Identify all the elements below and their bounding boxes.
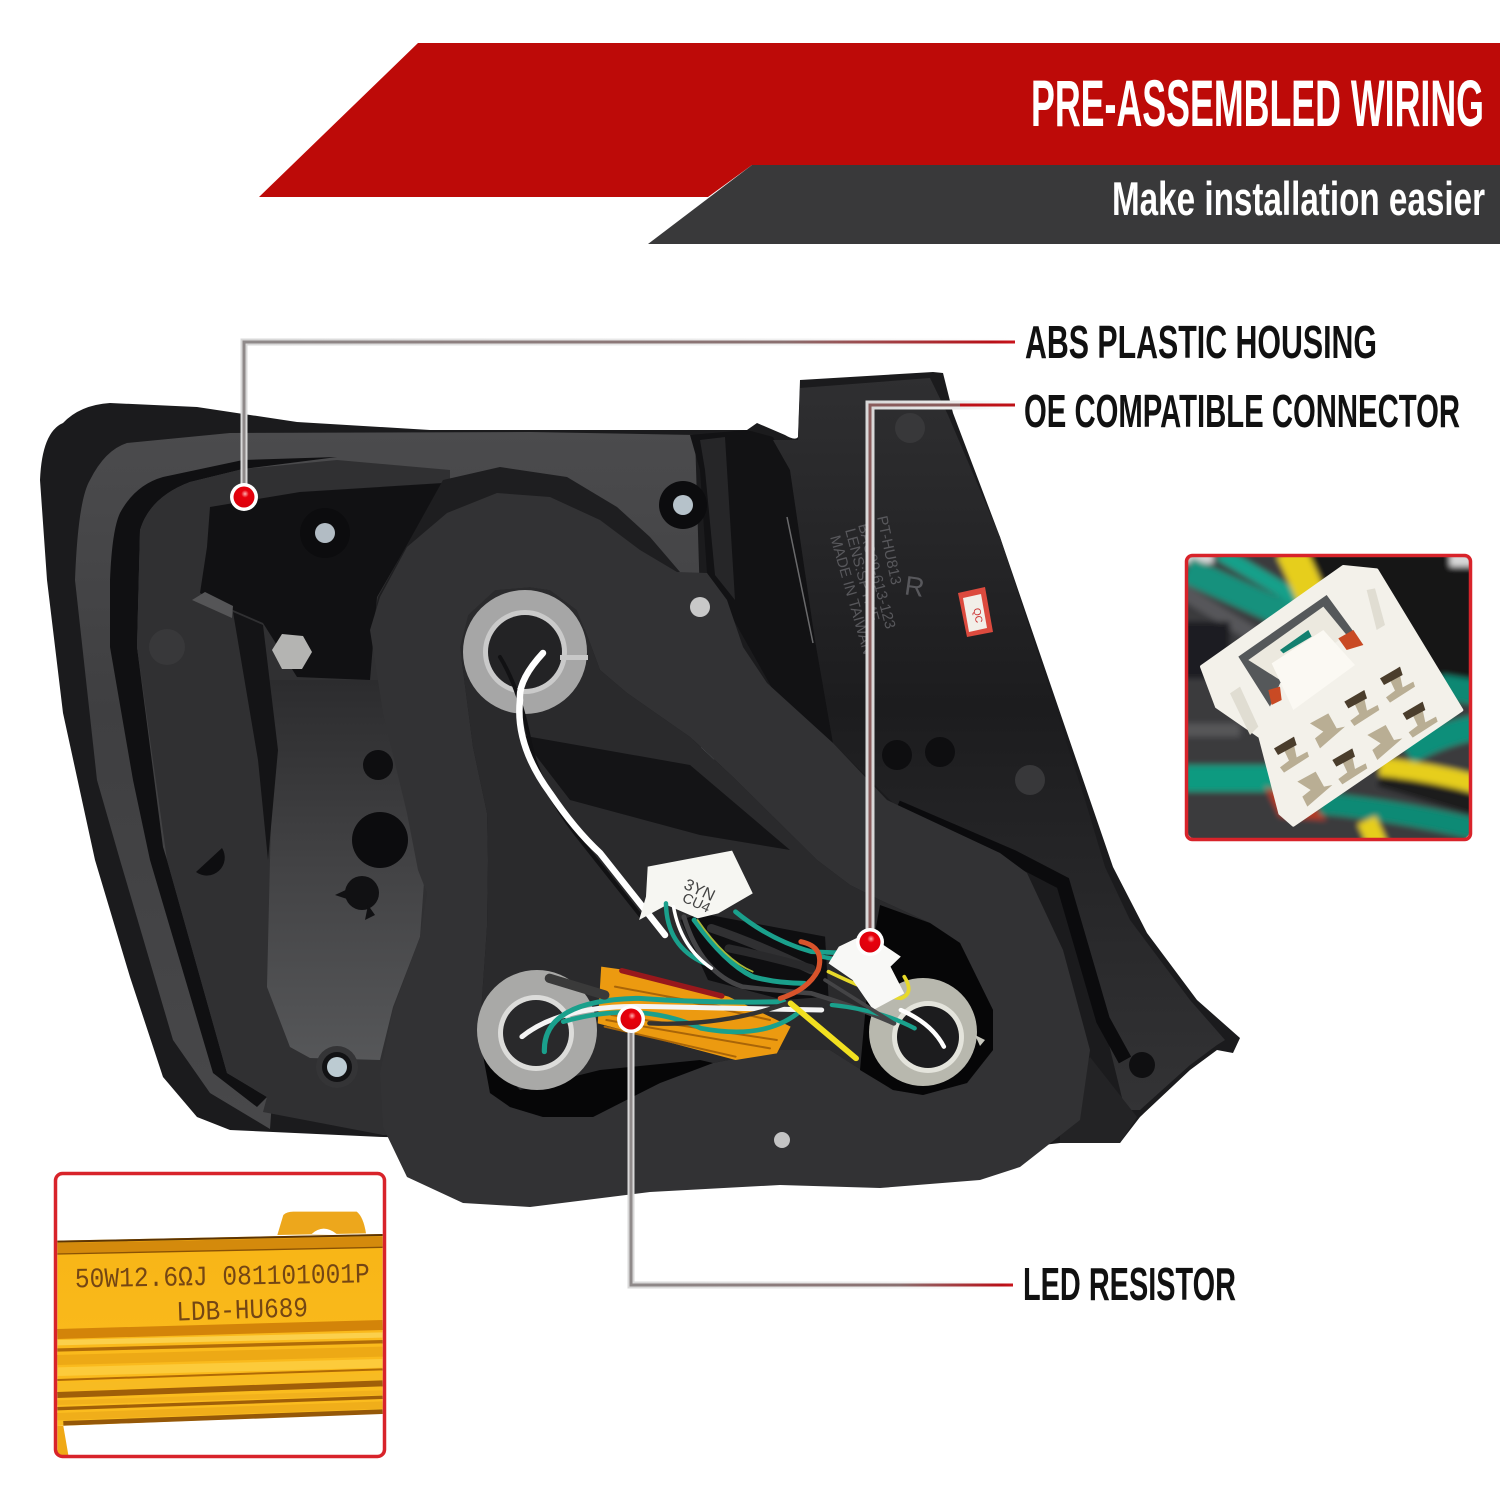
leader tip — [960, 404, 1015, 406]
green wires — [666, 903, 705, 963]
upper wires — [500, 653, 665, 935]
white connector — [639, 851, 753, 920]
connector body — [1202, 567, 1462, 825]
harness shadow — [680, 913, 829, 1000]
led resistor body — [598, 967, 791, 1060]
nub — [1129, 1052, 1155, 1078]
panel: resistor close-up — [55, 1173, 384, 1456]
part marks: LENS:SPYME — [841, 527, 882, 624]
leader halo — [244, 342, 1015, 497]
cavity shadow left — [482, 1050, 713, 1117]
cavity shadow right — [860, 905, 993, 1095]
part marks: BAG09-613-123 — [854, 522, 899, 631]
lighter rim band — [75, 432, 700, 1129]
sticker: QC — [970, 607, 984, 624]
leader line — [870, 405, 1015, 942]
leader halo — [631, 1019, 1013, 1285]
orange band — [780, 942, 820, 998]
socket: lower left — [477, 970, 597, 1090]
small white connector — [829, 933, 904, 1010]
cavity shadow centre — [520, 735, 790, 850]
tail light housing — [40, 372, 1240, 1207]
black recess — [200, 483, 443, 680]
leader line — [631, 1019, 1013, 1285]
inner panel — [137, 460, 450, 1135]
inner cavity — [460, 587, 993, 1117]
leader halo — [870, 405, 1015, 942]
part marks — [826, 514, 926, 656]
lower socket wires — [522, 1006, 822, 1037]
inset frame — [56, 1174, 384, 1456]
wiring harness: CU4 — [680, 890, 713, 917]
right wing — [773, 378, 1225, 1110]
label: LED RESISTOR — [1023, 1258, 1236, 1310]
screw — [316, 1046, 358, 1088]
resistor print: 50W12.6ΩJ 081101001P — [75, 1260, 370, 1296]
wing highlight line — [787, 517, 813, 643]
inset frame — [1186, 556, 1470, 840]
mounting tab — [277, 1212, 366, 1235]
terminals — [1280, 675, 1438, 807]
part marks: MADE IN TAIWAN — [826, 533, 876, 656]
cylinder sheen — [700, 437, 735, 600]
yellow wires — [791, 1003, 856, 1058]
socket: upper — [463, 590, 588, 714]
groove — [110, 457, 337, 1107]
marker dot — [230, 483, 258, 511]
right socket wires — [901, 1010, 944, 1047]
lower right block — [1060, 1057, 1137, 1143]
callout: led resistor — [617, 1005, 1236, 1310]
marker dot — [856, 928, 884, 956]
screw — [688, 733, 728, 773]
screw — [659, 481, 707, 529]
panel: connector close-up — [1180, 550, 1480, 850]
gold body — [57, 1234, 383, 1426]
banner: dark sub-header — [648, 165, 1500, 244]
hex nut — [272, 634, 312, 669]
sticker — [958, 587, 993, 637]
clip — [335, 876, 379, 920]
part marks: R — [903, 570, 926, 603]
dark bosses — [196, 737, 955, 876]
centre panel — [263, 680, 430, 1060]
ridge highlight — [192, 592, 233, 618]
marker dot — [617, 1005, 645, 1033]
outer silhouette — [40, 372, 1240, 1150]
callout: abs plastic housing — [230, 316, 1377, 511]
bosses — [149, 413, 1045, 926]
foam gasket — [370, 493, 1090, 1207]
wing channel — [897, 807, 1125, 1060]
round hole — [352, 812, 408, 868]
wiring harness — [522, 851, 944, 1060]
socket: lower right — [869, 978, 985, 1086]
black cylinder — [690, 430, 833, 743]
resistor print: LDB-HU689 — [176, 1294, 309, 1330]
dark wires — [711, 928, 811, 970]
leader line — [244, 342, 1015, 497]
screw — [300, 508, 350, 558]
panel shadow — [233, 612, 278, 860]
callout: oe compatible connector — [856, 385, 1460, 956]
foam pin — [774, 1132, 790, 1148]
foam ridge — [372, 467, 680, 630]
wiring harness: 3YN — [681, 876, 718, 905]
banner: red header — [259, 43, 1500, 197]
foam pin — [690, 597, 710, 617]
part marks: PT-HU813 — [873, 514, 904, 586]
